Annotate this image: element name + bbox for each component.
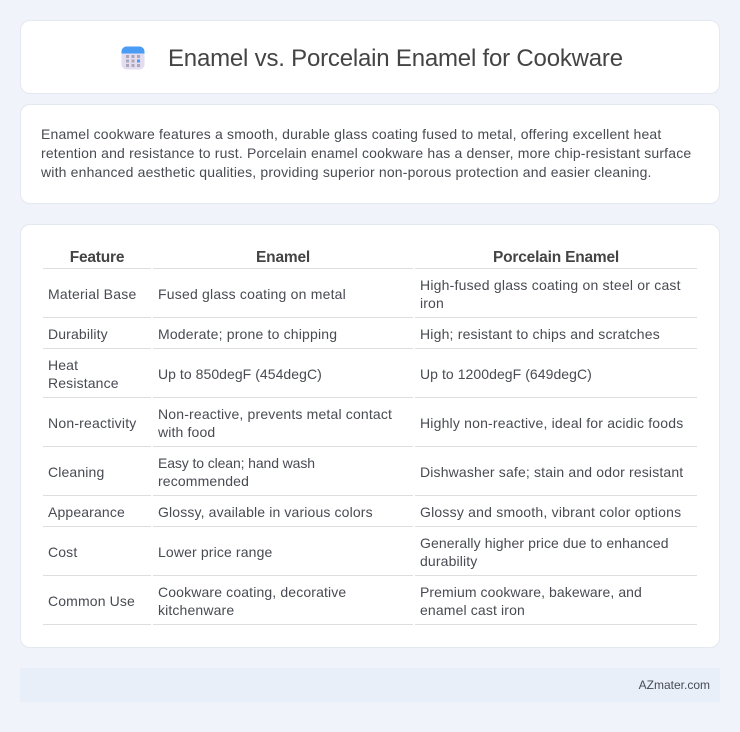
intro text: retention and resistance to rust. Porcelain enamel cookware has a denser, more chip-resistant surface	[41, 145, 691, 161]
title: Enamel vs. Porcelain Enamel for Cookware	[168, 45, 623, 72]
row: heat resistance: Up to 1200degF (649degC)	[420, 366, 592, 382]
row: appearance: Appearance	[48, 504, 125, 520]
row: durability: Durability	[48, 326, 108, 342]
footer bar	[20, 668, 720, 702]
row: heat resistance: Heat	[48, 357, 78, 373]
row: material base	[48, 277, 681, 311]
row: common use: Cookware coating, decorative	[158, 584, 346, 600]
table header: Porcelain Enamel	[493, 249, 619, 266]
row: cleaning: recommended	[158, 473, 249, 489]
row: common use: Premium cookware, bakeware, and	[420, 584, 642, 600]
row: cost	[48, 535, 669, 569]
row: material base: High-fused glass coating on steel or cast	[420, 277, 681, 293]
row: cost: Generally higher price due to enhanced	[420, 535, 669, 551]
row: heat resistance	[48, 357, 592, 391]
intro text	[41, 126, 691, 180]
icon: calendar	[122, 46, 144, 70]
row: durability	[48, 326, 660, 342]
table header: Enamel	[256, 249, 310, 266]
panel: title header	[20, 20, 720, 94]
row: cleaning: Easy to clean; hand wash	[158, 455, 315, 471]
intro text: with enhanced aesthetic qualities, providing superior non-porous protection and easier cleaning.	[41, 164, 652, 180]
row: non-reactivity: Non-reactive, prevents metal contact	[158, 406, 392, 422]
table header: Feature	[70, 249, 124, 266]
row: common use: Common Use	[48, 593, 135, 609]
row: material base: iron	[420, 295, 444, 311]
row: non-reactivity: Non-reactivity	[48, 415, 137, 431]
row: cleaning	[48, 455, 684, 489]
row: common use	[48, 584, 642, 618]
row: non-reactivity: with food	[158, 424, 215, 440]
row: heat resistance: Resistance	[48, 375, 119, 391]
row: appearance	[48, 504, 681, 520]
row: material base: Material Base	[48, 286, 136, 302]
panel: introduction	[20, 104, 720, 204]
row: cleaning: Cleaning	[48, 464, 104, 480]
intro text: Enamel cookware features a smooth, durable glass coating fused to metal, offering excellent heat	[41, 126, 661, 142]
row: durability: High; resistant to chips and scratches	[420, 326, 660, 342]
table header	[70, 249, 619, 266]
footer credit: AZmater.com	[639, 678, 710, 692]
panel: comparison table	[20, 224, 720, 648]
row: non-reactivity	[48, 406, 683, 440]
row: cost: Lower price range	[158, 544, 272, 560]
row: heat resistance: Up to 850degF (454degC)	[158, 366, 322, 382]
row: common use: enamel cast iron	[420, 602, 525, 618]
row: common use: kitchenware	[158, 602, 234, 618]
row: cost: durability	[420, 553, 477, 569]
row: cleaning: Dishwasher safe; stain and odor resistant	[420, 464, 683, 480]
row: cost: Cost	[48, 544, 77, 560]
row: durability: Moderate; prone to chipping	[158, 326, 337, 342]
row: appearance: Glossy, available in various colors	[158, 504, 373, 520]
row: material base: Fused glass coating on metal	[158, 286, 346, 302]
row: non-reactivity: Highly non-reactive, ideal for acidic foods	[420, 415, 683, 431]
row: appearance: Glossy and smooth, vibrant color options	[420, 504, 681, 520]
